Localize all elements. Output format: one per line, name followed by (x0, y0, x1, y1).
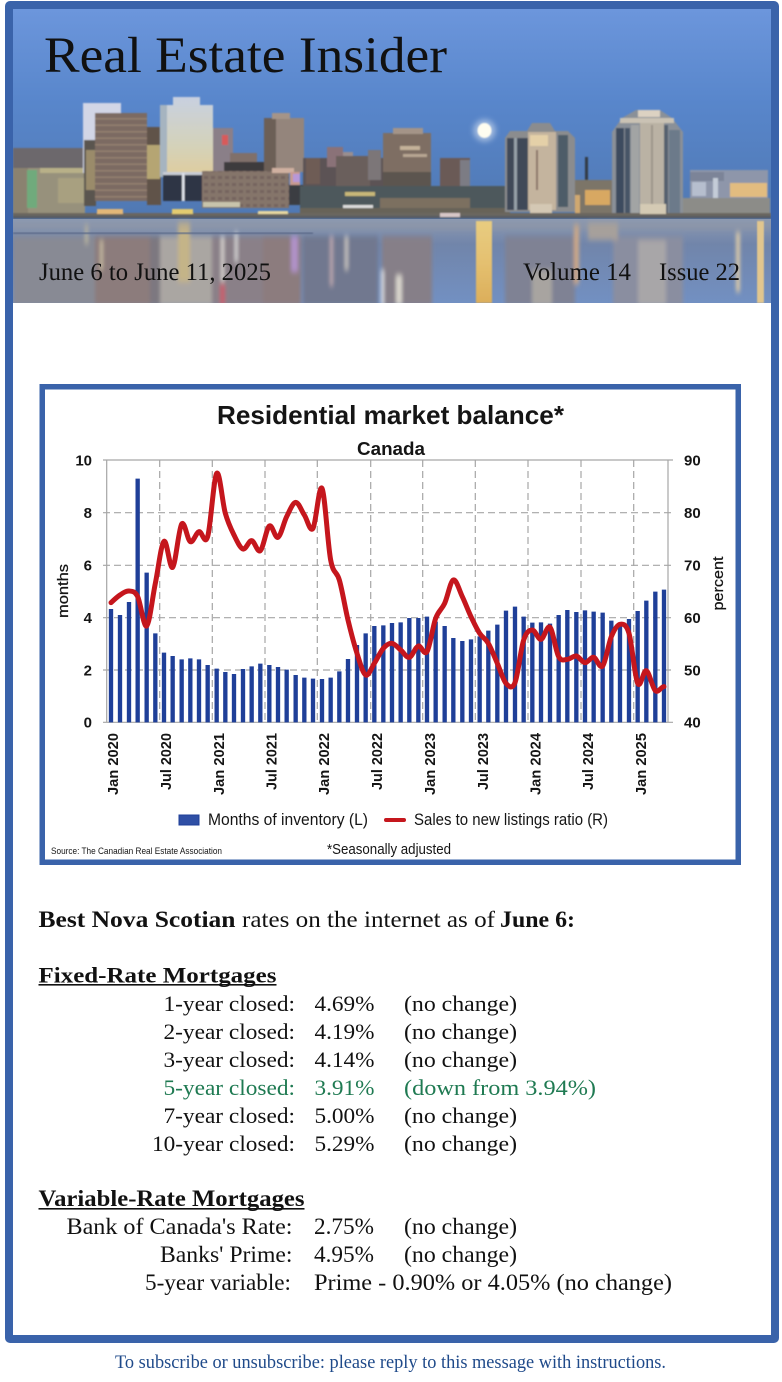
fixed-rate table: 5.29% (314, 1131, 374, 1156)
variable-rate table: 5-year variable: (145, 1270, 291, 1295)
masthead title: Real Estate Insider (44, 28, 447, 84)
variable-rate table: (no change) (404, 1214, 517, 1239)
fixed-rate table: 4.69% (314, 991, 374, 1016)
highlighted 5-year row: (down from 3.94%) (404, 1075, 596, 1100)
seasonal adjustment note: *Seasonally adjusted (327, 842, 451, 858)
left axis labels: 10 (75, 452, 92, 470)
line: sales to new listings ratio (111, 473, 664, 691)
moon reflection column (476, 221, 492, 303)
right axis labels: 90 (684, 452, 701, 470)
x axis date labels: Jan 2020 (105, 733, 122, 795)
fixed-rate table: 10-year closed: (152, 1131, 295, 1156)
right axis labels: 50 (684, 662, 701, 680)
dark water line (13, 232, 313, 234)
x axis date labels: Jul 2021 (264, 733, 280, 790)
footer subscribe note: To subscribe or unsubscribe: please reply to this message with instructions. (115, 1353, 666, 1373)
sky (13, 9, 771, 219)
variable-rate table (66, 1214, 672, 1295)
right shore light reflection (757, 221, 764, 303)
x axis date labels: Jul 2024 (580, 732, 597, 790)
intro line: June 6: (500, 907, 575, 932)
variable-rate mortgages heading: Variable-Rate Mortgages (38, 1186, 305, 1211)
legend (179, 811, 608, 829)
issue date: June 6 to June 11, 2025 (39, 259, 271, 286)
city skyline buildings (13, 97, 771, 218)
gridlines and axes (103, 460, 673, 722)
fixed-rate table: 2-year closed: (164, 1019, 295, 1044)
right axis title: percent (710, 556, 727, 610)
water reflections (13, 222, 771, 306)
variable-rate table: 2.75% (314, 1214, 374, 1239)
panel: residential market balance chart (42, 387, 738, 862)
water (13, 219, 771, 303)
left axis title: months (55, 564, 72, 618)
volume number: Volume 14 (523, 259, 631, 286)
x axis date labels: Jan 2023 (422, 733, 439, 795)
fixed-rate table: 4.14% (314, 1047, 374, 1072)
variable-rate table: 4.95% (314, 1242, 374, 1267)
intro line: Best Nova Scotian (38, 907, 236, 932)
fixed-rate table: (no change) (404, 1047, 517, 1072)
right axis labels: 60 (684, 610, 701, 627)
x axis date labels: Jan 2022 (316, 733, 333, 795)
moon (474, 120, 496, 142)
header banner: harbour skyline photo (13, 9, 771, 306)
fixed-rate table: 4.19% (314, 1019, 374, 1044)
x axis date labels: Jan 2021 (211, 733, 228, 795)
fixed-rate table: 3-year closed: (164, 1047, 295, 1072)
right axis labels: 40 (684, 714, 701, 732)
left axis labels: 6 (84, 558, 92, 574)
intro line (38, 907, 575, 932)
fixed-rate table: 5.00% (314, 1103, 374, 1128)
variable-rate table: Bank of Canada's Rate: (66, 1214, 292, 1239)
fixed-rate table (152, 991, 596, 1156)
left axis labels: 4 (84, 610, 93, 627)
highlighted 5-year row: 5-year closed: (164, 1075, 295, 1100)
right axis labels (684, 452, 701, 732)
x axis date labels: Jul 2022 (369, 733, 386, 790)
x axis date labels: Jul 2023 (475, 733, 492, 790)
fixed-rate table: 7-year closed: (164, 1103, 295, 1128)
x axis date labels (105, 732, 650, 795)
right axis labels: 70 (684, 558, 701, 574)
variable-rate table: (no change) (404, 1242, 517, 1267)
fixed-rate table: (no change) (404, 1131, 517, 1156)
fixed-rate table: (no change) (404, 991, 517, 1016)
highlighted 5-year row: 3.91% (314, 1075, 374, 1100)
x axis date labels: Jan 2024 (528, 732, 544, 795)
bars: months of inventory (111, 479, 664, 722)
highlighted 5-year row (164, 1075, 596, 1100)
right axis labels: 80 (684, 505, 701, 522)
intro line: rates on the internet as of (242, 907, 495, 932)
fixed-rate table: 1-year closed: (164, 991, 295, 1016)
x axis date labels: Jan 2025 (633, 733, 650, 795)
source note: Source: The Canadian Real Estate Association (51, 846, 222, 857)
fixed-rate table: (no change) (404, 1103, 517, 1128)
left axis labels: 2 (84, 662, 92, 680)
left axis labels: 0 (84, 714, 92, 732)
x axis date labels: Jul 2020 (158, 733, 175, 790)
variable-rate table: Prime - 0.90% or 4.05% (no change) (314, 1270, 672, 1295)
left axis labels (75, 452, 93, 732)
left axis labels: 8 (84, 505, 92, 522)
chart subtitle: Canada (357, 438, 426, 459)
chart title: Residential market balance* (217, 400, 565, 430)
legend: Sales to new listings ratio (R) (414, 811, 608, 829)
variable-rate table: Banks' Prime: (160, 1242, 292, 1267)
legend: Months of inventory (L) (208, 811, 368, 829)
fixed-rate table: (no change) (404, 1019, 517, 1044)
fixed-rate mortgages heading: Fixed-Rate Mortgages (38, 962, 277, 988)
issue number: Issue 22 (659, 259, 740, 286)
